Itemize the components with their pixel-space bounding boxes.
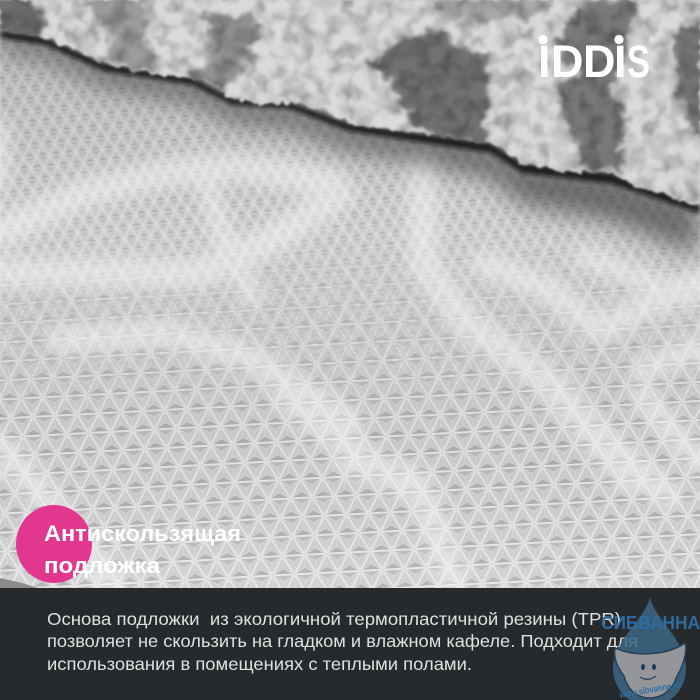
watermark: bath face (640, 664, 656, 679)
body text: позволяет не скользить на гладком и влажном кафеле. Подходит для (47, 631, 638, 651)
heading: anti-slip backing (44, 521, 241, 578)
rug contact shadow line (0, 30, 700, 214)
watermark: sibvanna drop and bath (601, 597, 700, 700)
logo: wordmark: IDDI (538, 36, 627, 87)
fold at bottom left corner (0, 578, 38, 588)
logo: IDDIS (538, 35, 655, 87)
body text: использования в помещениях с теплыми полами. (47, 654, 472, 674)
shadow under the rug (0, 30, 700, 256)
watermark: url: www.sibvanna.ru (618, 679, 681, 700)
heading: anti-slip backing: подложка (44, 553, 161, 578)
logo: registered mark: ® (649, 36, 655, 44)
logo: letter S: S (627, 36, 650, 87)
bottom dark panel (0, 588, 700, 700)
watermark: bathtub (615, 643, 686, 698)
body text (47, 609, 638, 674)
badge: pink circle (16, 505, 92, 583)
body text: Основа подложки из экологичной термопластичной резины (TPR) (47, 609, 621, 629)
photo: tufted rug (0, 0, 700, 215)
watermark: water drop (613, 597, 686, 700)
heading: anti-slip backing: Антискользящая (44, 521, 241, 546)
logo dot: second i (614, 35, 624, 44)
logo dot: first i (538, 35, 548, 44)
